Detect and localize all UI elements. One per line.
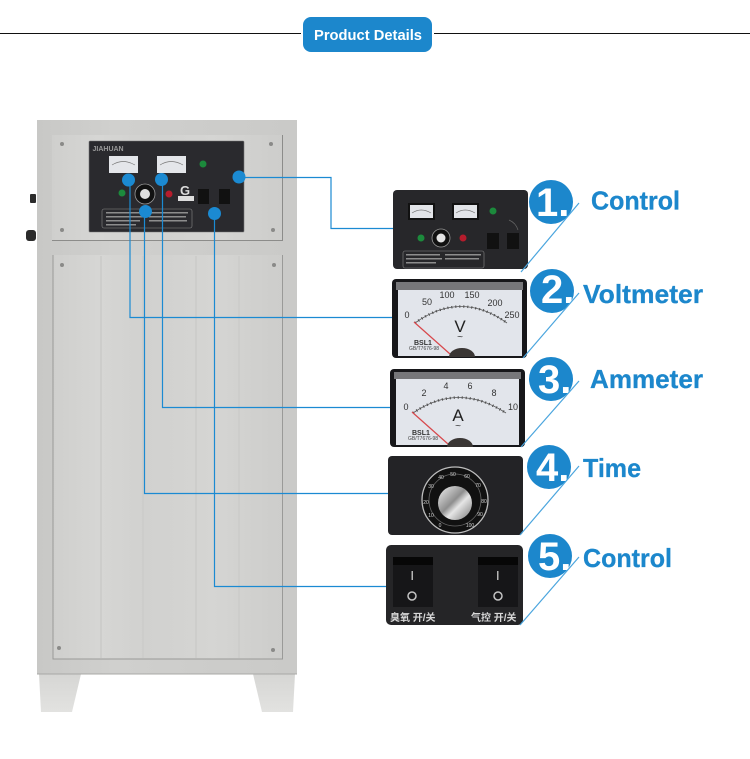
thumbnail 3: ammeter bbox=[390, 369, 525, 447]
label: Time: Time bbox=[583, 453, 641, 483]
callout wire: voltmeter bbox=[130, 180, 393, 318]
label: Ammeter: Ammeter bbox=[590, 364, 703, 394]
badge 1: 1. bbox=[536, 181, 569, 225]
diagonal pointer 1 bbox=[521, 203, 579, 272]
upper door bbox=[52, 135, 282, 241]
thumbnail 3: ammeter: 2 bbox=[421, 388, 427, 398]
diagonal pointer 5 bbox=[520, 557, 579, 625]
thumbnail 2: voltmeter: 250 bbox=[504, 310, 520, 320]
thumbnail 2: voltmeter: 200 bbox=[487, 298, 503, 308]
callout wire: ammeter bbox=[162, 180, 390, 408]
thumbnail 3: ammeter: ~ bbox=[455, 421, 461, 432]
header rule right bbox=[434, 32, 750, 34]
thumbnail 2: voltmeter bbox=[392, 279, 527, 358]
thumbnail 4: timer dial: 50 bbox=[450, 472, 456, 478]
thumbnail 4: timer dial: 40 bbox=[438, 475, 444, 481]
marker dots bbox=[122, 170, 246, 220]
thumbnail 2: voltmeter: 100 bbox=[439, 290, 455, 300]
thumbnail 2: voltmeter: 0 bbox=[404, 310, 410, 320]
control panel on cabinet: G bbox=[180, 183, 190, 198]
thumbnail 4: timer dial: 70 bbox=[475, 483, 481, 489]
thumbnail 4: timer dial: 100 bbox=[466, 523, 474, 529]
label: Voltmeter: Voltmeter bbox=[583, 279, 703, 309]
control panel on cabinet: JIAHUAN bbox=[92, 146, 124, 153]
lower door bbox=[53, 255, 282, 659]
badge 3: 3. bbox=[538, 358, 571, 402]
cabinet legs bbox=[39, 674, 295, 712]
callout wire: switches bbox=[214, 213, 387, 586]
thumbnail 2: voltmeter: 150 bbox=[464, 290, 480, 300]
thumbnail 5: rocker switches: 气控 开/关 bbox=[471, 611, 517, 624]
product: ozone generator cabinet bbox=[26, 120, 297, 712]
thumbnail 2: voltmeter: BSL1 bbox=[414, 340, 432, 347]
diagonal pointer 2 bbox=[523, 293, 579, 358]
side fittings bbox=[26, 194, 36, 241]
thumbnail 4: timer dial: 30 bbox=[428, 484, 434, 490]
heading: Product Details bbox=[303, 17, 432, 52]
thumbnail 3: ammeter: GB/T7676-98 bbox=[408, 436, 438, 442]
thumbnail 1: control panel bbox=[393, 190, 528, 269]
thumbnail 3: ammeter: 0 bbox=[403, 402, 409, 412]
thumbnail 4: timer dial: 90 bbox=[477, 512, 483, 518]
diagonal pointer 4 bbox=[520, 466, 579, 535]
thumbnail 4: timer dial: 60 bbox=[464, 474, 470, 480]
thumbnail 4: timer dial: 80 bbox=[481, 499, 487, 505]
thumbnail 3: ammeter: 8 bbox=[491, 388, 497, 398]
thumbnail 2: voltmeter: V bbox=[454, 317, 466, 336]
thumbnail 2: voltmeter: GB/T7676-98 bbox=[409, 346, 439, 352]
thumbnail 3: ammeter: BSL1 bbox=[412, 430, 430, 437]
thumbnail 5: rocker switches bbox=[386, 545, 523, 625]
thumbnail 4: timer dial: 20 bbox=[423, 500, 429, 506]
callout wire: control panel bbox=[239, 178, 393, 228]
thumbnail 2: voltmeter: ~ bbox=[457, 332, 463, 343]
badge 5: 5. bbox=[538, 535, 571, 579]
badge 2: 2. bbox=[541, 268, 574, 312]
thumbnail 5: rocker switches: 臭氧 开/关 bbox=[390, 611, 436, 624]
thumbnail 4: timer dial: 10 bbox=[428, 513, 434, 519]
thumbnail 4: timer dial: 0 bbox=[439, 523, 442, 529]
header rule left bbox=[0, 32, 301, 34]
thumbnail 3: ammeter: A bbox=[452, 406, 464, 425]
control panel on cabinet bbox=[89, 141, 244, 232]
thumbnail 2: voltmeter: 50 bbox=[422, 297, 432, 307]
thumbnail 3: ammeter: 10 bbox=[508, 402, 518, 412]
badge 4: 4. bbox=[536, 446, 569, 490]
heading: Product Details: Product Details bbox=[314, 28, 422, 44]
label: Control: Control bbox=[591, 186, 680, 216]
diagonal pointer 3 bbox=[521, 381, 579, 447]
callout wire: timer bbox=[144, 211, 388, 494]
cabinet body bbox=[37, 120, 297, 674]
thumbnail 3: ammeter: 4 bbox=[443, 381, 449, 391]
thumbnail 4: timer dial bbox=[388, 456, 523, 535]
thumbnail 3: ammeter: 6 bbox=[467, 381, 473, 391]
label: Control: Control bbox=[583, 543, 672, 573]
